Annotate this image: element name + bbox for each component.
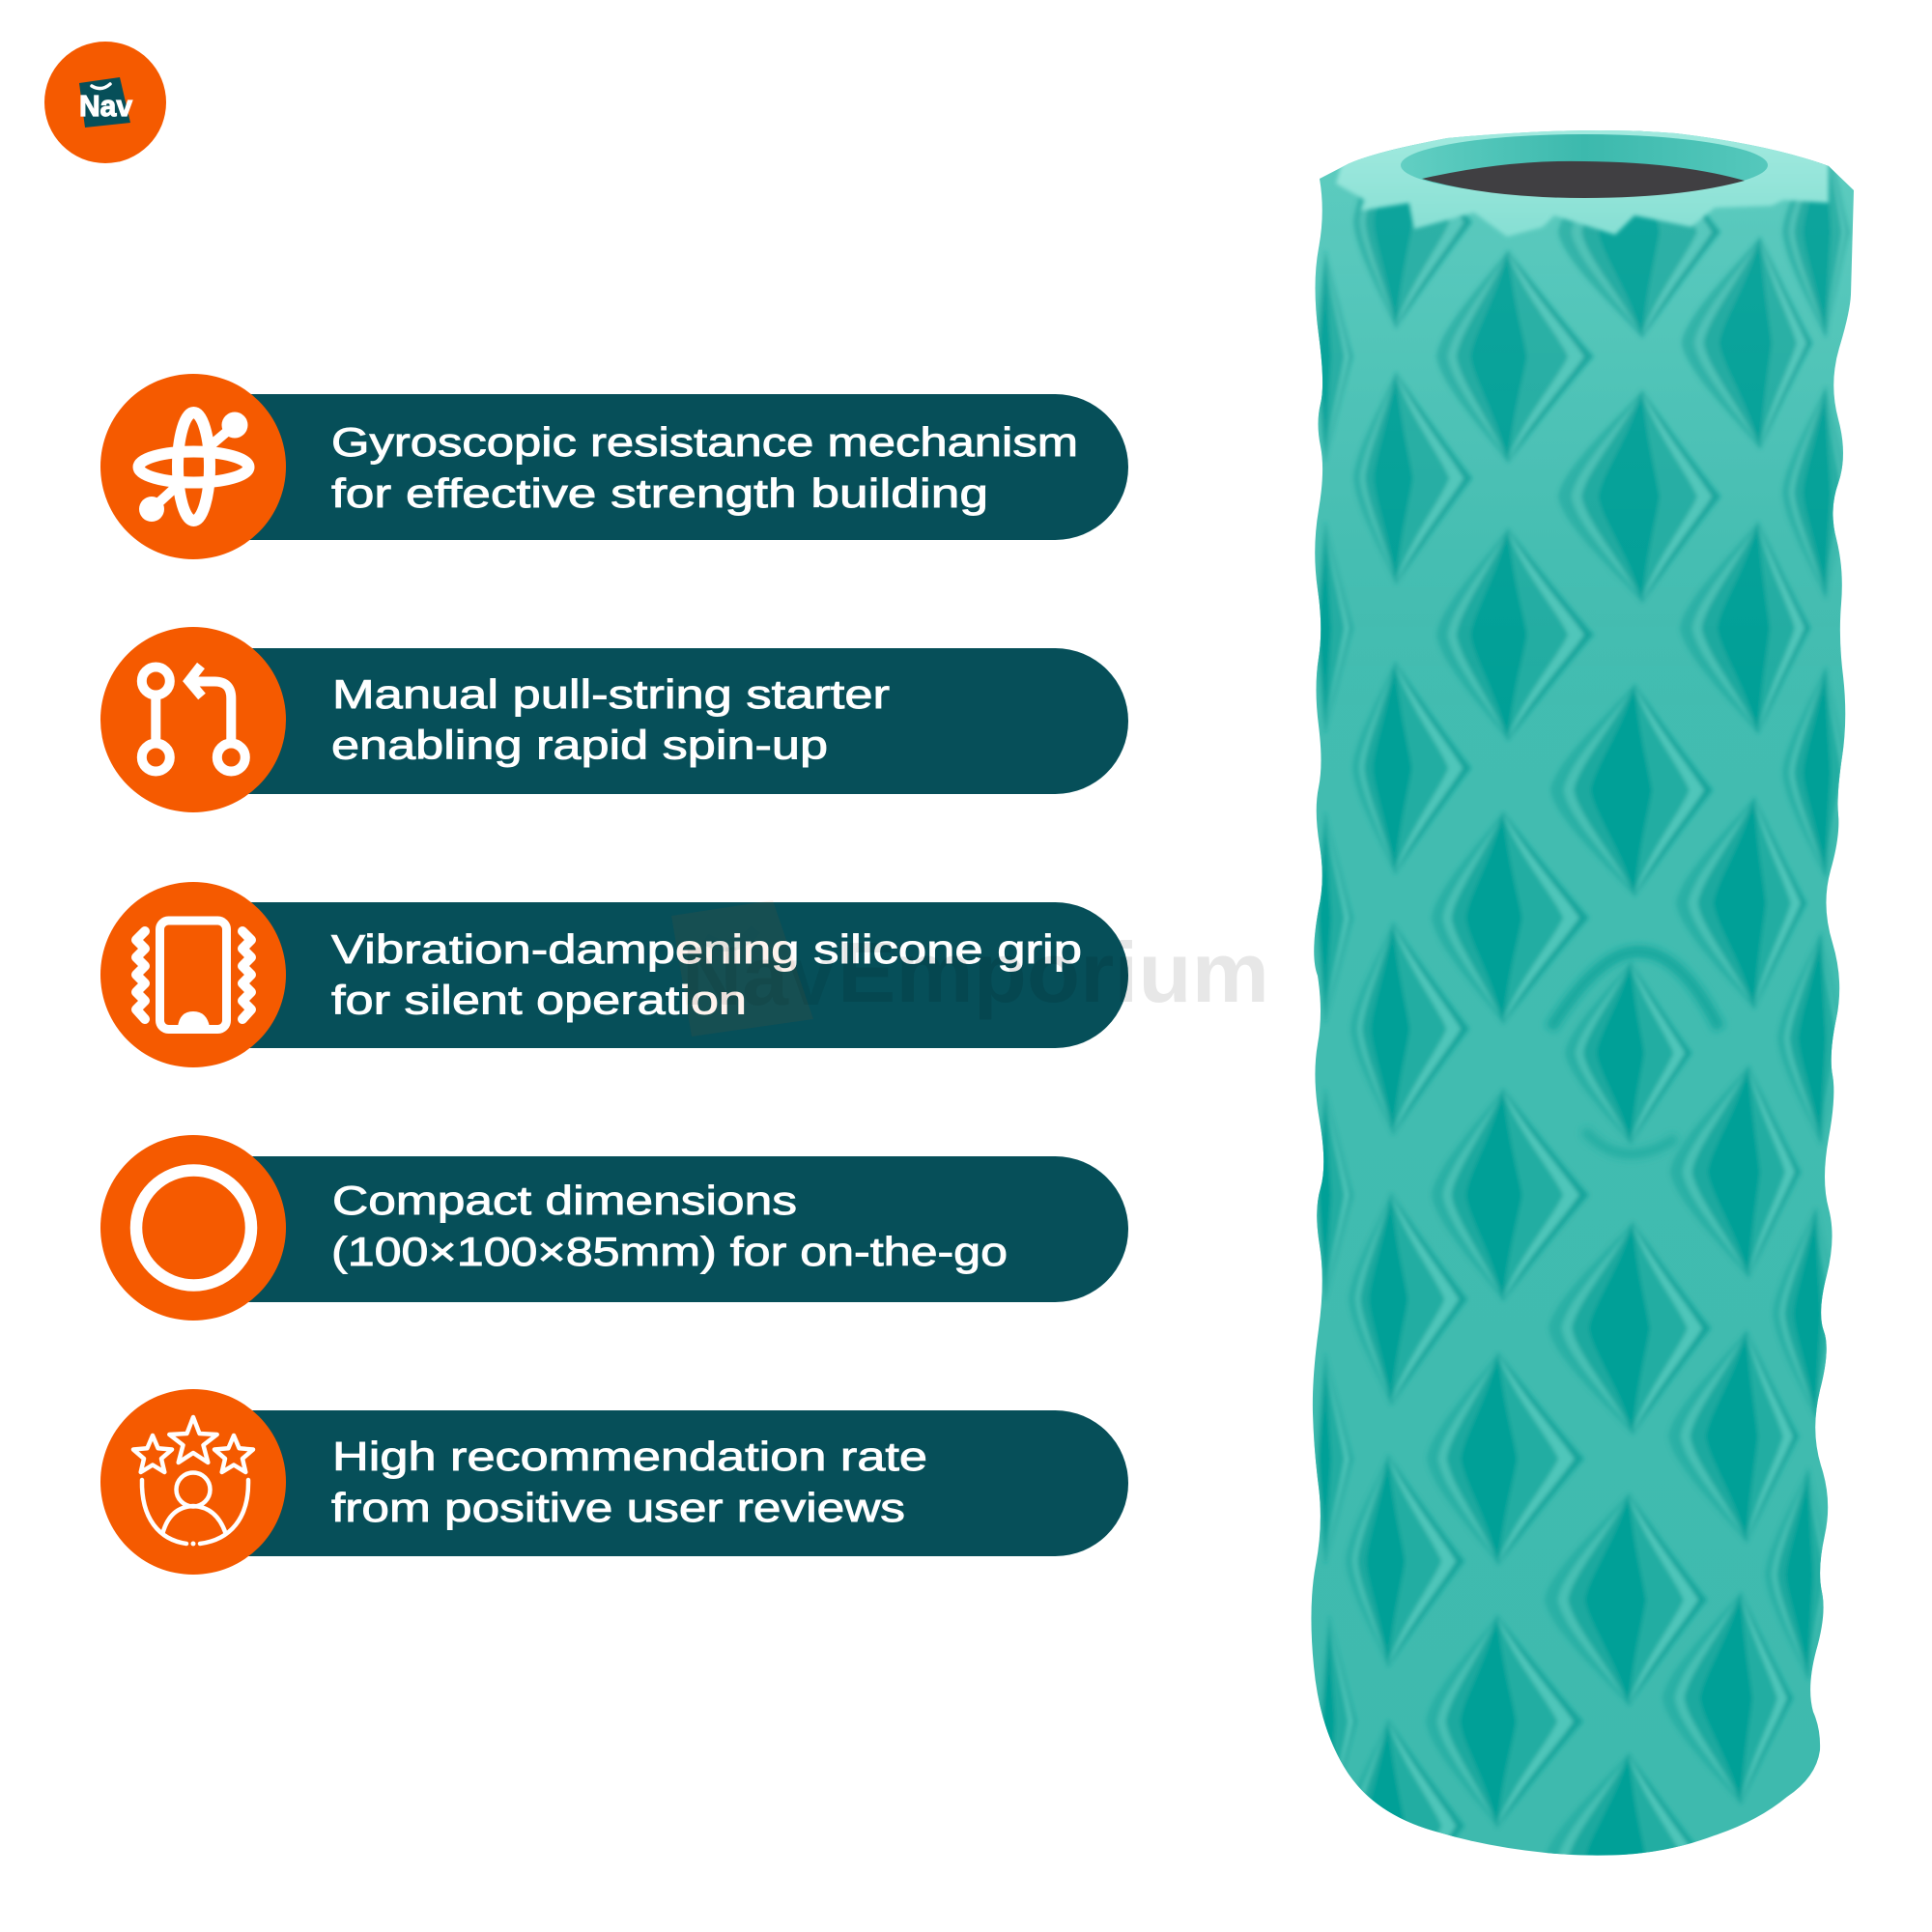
icon badge: pull-string arrow	[100, 627, 286, 812]
feature text 1: for effective strength building	[331, 470, 988, 516]
icon badge: stars and user	[100, 1389, 286, 1575]
roller diamond pattern	[1314, 116, 1849, 1932]
feature text 4	[331, 1178, 1008, 1274]
pill bar 3	[145, 902, 1128, 1048]
feature text 5	[331, 1434, 927, 1530]
feature row 1: gyroscopic resistance	[100, 374, 1128, 559]
feature text 4: (100×100×85mm) for on-the-go	[331, 1229, 1008, 1274]
roller rim	[1335, 130, 1832, 238]
roller body	[1294, 116, 1874, 1874]
feature row 5: recommendation rate	[100, 1389, 1128, 1575]
brand logo badge: Nav	[79, 89, 133, 123]
roller top highlight	[1320, 168, 1854, 392]
pill bar 5	[145, 1410, 1128, 1556]
pill bar 1	[145, 394, 1128, 540]
feature text 3: for silent operation	[331, 978, 747, 1022]
feature row 3: silicone grip	[100, 882, 1128, 1067]
roller hole	[1401, 134, 1768, 198]
feature text 3: Vibration-dampening silicone grip	[331, 926, 1082, 972]
foam roller product	[1311, 130, 1854, 1856]
pill bar 2	[145, 648, 1128, 794]
watermark	[671, 900, 1269, 1037]
feature text 5: from positive user reviews	[331, 1485, 905, 1530]
icon badge: vibration dampening grip	[100, 882, 286, 1067]
roller soft halo shadows	[1550, 952, 1719, 1154]
icon badge: ring	[100, 1135, 286, 1321]
brand logo badge	[44, 42, 166, 163]
feature text 1	[331, 419, 1078, 516]
feature text 2: enabling rapid spin-up	[331, 723, 828, 767]
feature text 5: High recommendation rate	[332, 1434, 927, 1479]
feature text 2: Manual pull-string starter	[332, 671, 890, 717]
watermark: Nav	[682, 930, 835, 1023]
feature text 4: Compact dimensions	[332, 1178, 797, 1223]
feature text 2	[331, 671, 890, 767]
pill bar 4	[145, 1156, 1128, 1302]
feature row 2: pull-string starter	[100, 627, 1128, 812]
watermark: Emporium	[838, 924, 1269, 1020]
feature row 4: compact dimensions	[100, 1135, 1128, 1321]
feature text 1: Gyroscopic resistance mechanism	[331, 419, 1078, 465]
icon badge: gyroscope	[100, 374, 286, 559]
feature text 3	[331, 926, 1082, 1022]
